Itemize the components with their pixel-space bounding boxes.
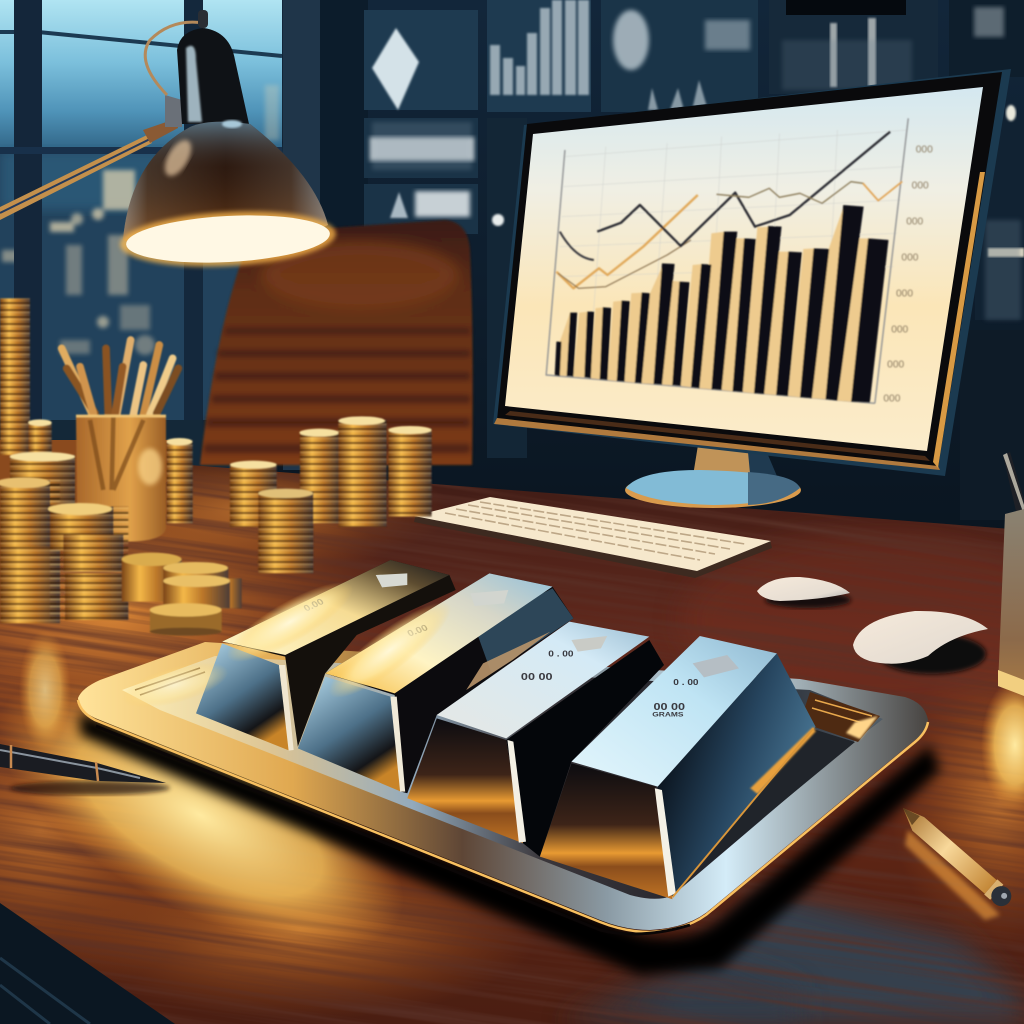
bar and line chart on screen: 000: [916, 145, 933, 156]
back wall: [0, 0, 1024, 540]
bar and line chart on screen: 000: [896, 289, 913, 300]
bar 4: 00 00: [654, 702, 685, 713]
large mouse: [853, 611, 988, 674]
bar 3: 0 . 00: [548, 650, 574, 658]
bar 3: [407, 622, 664, 857]
background coin stacks: [0, 298, 193, 523]
monitor stand: [625, 445, 801, 508]
bar and line chart on screen: [546, 118, 933, 405]
foreground coin stacks: [0, 416, 432, 636]
tray shadow: [80, 712, 940, 975]
pencil cup with gold pens: [62, 340, 178, 542]
bar 2: 0.00: [406, 623, 431, 639]
left pen: [0, 744, 170, 795]
bar and line chart on screen: 000: [891, 325, 909, 336]
window with night city view: [0, 0, 368, 470]
right pen cup: [998, 452, 1024, 696]
gold coin stacks and pen cup: [0, 298, 432, 636]
bar 1: 0.00: [302, 597, 327, 614]
small mouse: [757, 577, 851, 608]
right gold pen: [895, 802, 1015, 920]
bar 4: [540, 636, 816, 899]
lamp light glow on bars: [117, 569, 462, 717]
monitor: [493, 69, 1011, 508]
wall data panels: [364, 0, 1024, 520]
bar and line chart on screen: 000: [883, 394, 901, 405]
desk surface: [0, 440, 1024, 1024]
bar and line chart on screen: 000: [912, 181, 929, 192]
bar 4: GRAMS: [652, 711, 684, 718]
bar and line chart on screen: 000: [901, 253, 919, 264]
bar 2: [298, 573, 574, 793]
keyboard: [414, 497, 772, 578]
bar and line chart on screen: 000: [887, 359, 905, 370]
panel graphic: diamond: [372, 28, 419, 110]
desk lamp: [0, 10, 337, 272]
silver bars: [196, 560, 816, 899]
bar 3: 00 00: [521, 672, 552, 683]
bar 1: [196, 560, 456, 751]
panel graphic: histogram: [490, 0, 589, 95]
bar 4: 0 . 00: [673, 678, 699, 687]
bar and line chart on screen: 000: [906, 217, 924, 228]
metal tray: [78, 642, 940, 975]
office chair: [200, 220, 473, 465]
